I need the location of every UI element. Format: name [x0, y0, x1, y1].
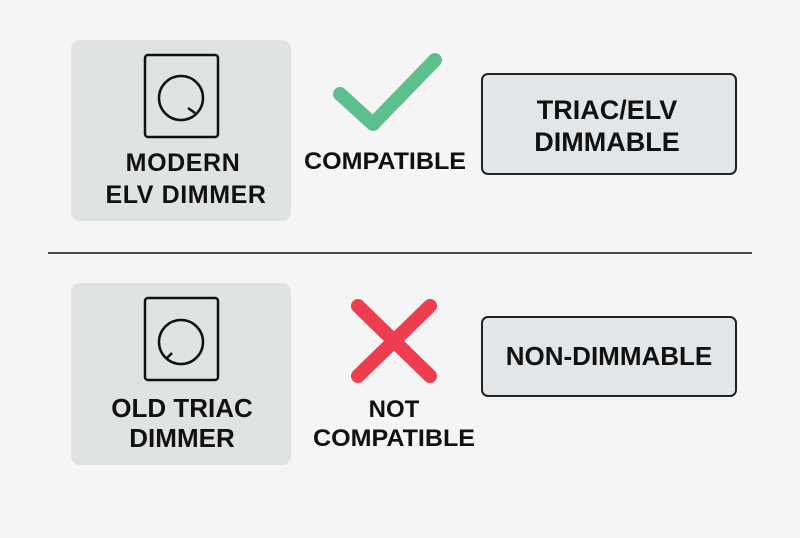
- icon: dimmer knob old: [145, 298, 218, 380]
- box: triac/elv dimmable: TRIAC/ELV: [537, 95, 677, 125]
- label: compatible: COMPATIBLE: [304, 148, 466, 175]
- panel: modern ELV dimmer: [71, 40, 291, 221]
- box: non-dimmable: NON-DIMMABLE: [506, 341, 712, 371]
- label: not compatible: NOT: [369, 396, 420, 423]
- icon: check mark: [340, 60, 435, 124]
- label: old triac dimmer: DIMMER: [129, 423, 235, 453]
- label: not compatible: COMPATIBLE: [313, 425, 475, 452]
- box: non-dimmable: [482, 317, 736, 396]
- label: old triac dimmer: OLD TRIAC: [111, 393, 253, 423]
- panel: old triac dimmer: [71, 283, 291, 465]
- label: modern elv dimmer: MODERN: [126, 149, 240, 177]
- icon: dimmer knob modern: [145, 55, 218, 137]
- label: modern elv dimmer: ELV DIMMER: [105, 181, 267, 209]
- icon: cross mark: [358, 306, 430, 376]
- box: triac/elv dimmable: DIMMABLE: [534, 127, 680, 157]
- box: triac/elv dimmable: [482, 74, 736, 174]
